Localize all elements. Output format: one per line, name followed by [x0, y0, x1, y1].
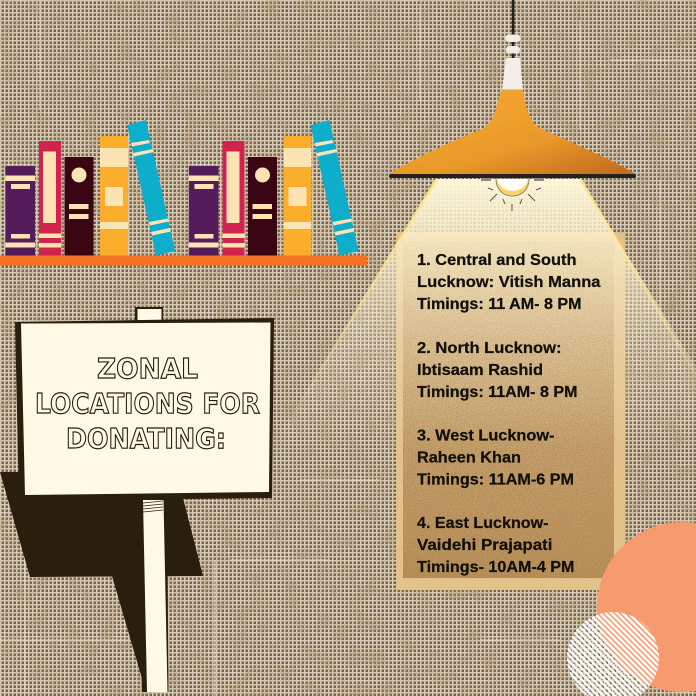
bulb [481, 178, 544, 211]
leaning blue book [310, 120, 358, 256]
decorative circles [565, 522, 696, 696]
location list: 4. East Lucknow- [417, 515, 548, 532]
dark maroon book [64, 157, 94, 256]
cord [512, 0, 514, 60]
red book [39, 141, 61, 256]
location list: Timings: 11 AM- 8 PM [417, 296, 582, 313]
lamp shade [390, 90, 635, 175]
collars [506, 34, 520, 54]
dark maroon book [248, 157, 277, 256]
yellow book [284, 136, 312, 256]
location list: Timings- 10AM-4 PM [417, 559, 574, 576]
cork surface [403, 241, 614, 578]
sign title: DONATING: [66, 422, 226, 455]
location list: Timings: 11AM-6 PM [417, 472, 574, 488]
sign shadow [0, 472, 203, 682]
yellow book [100, 136, 128, 256]
signpost [0, 307, 274, 692]
location list: Timings: 11AM- 8 PM [417, 384, 578, 401]
location list: 1. Central and South [417, 252, 576, 269]
red book [222, 141, 244, 256]
corkboard [396, 233, 625, 590]
books: first set [5, 120, 175, 256]
location list [417, 252, 601, 576]
bulb rays [488, 188, 541, 211]
sign title: LOCATIONS FOR [35, 387, 260, 420]
shade rim [389, 174, 636, 178]
leaning blue book [127, 120, 175, 256]
purple book [5, 166, 35, 256]
board frame [396, 233, 625, 590]
peach circle [597, 522, 696, 692]
purple book [189, 166, 218, 256]
sign board [15, 318, 274, 501]
sign title: ZONAL [97, 352, 198, 385]
post [135, 307, 168, 692]
sign title [35, 352, 260, 455]
striped circle [565, 610, 661, 696]
shelf plank [0, 256, 367, 266]
pendant lamp [389, 0, 636, 211]
location list: 2. North Lucknow: [417, 340, 562, 357]
location list: 3. West Lucknow- [417, 428, 554, 444]
location list: Lucknow: Vitish Manna [417, 274, 601, 291]
location list: Vaidehi Prajapati [417, 537, 552, 554]
books: second set [189, 120, 358, 256]
neck [502, 58, 523, 90]
light beam [258, 179, 696, 470]
location list: Ibtisaam Rashid [417, 362, 543, 379]
location list: Raheen Khan [417, 450, 521, 466]
bookshelf [0, 120, 367, 266]
